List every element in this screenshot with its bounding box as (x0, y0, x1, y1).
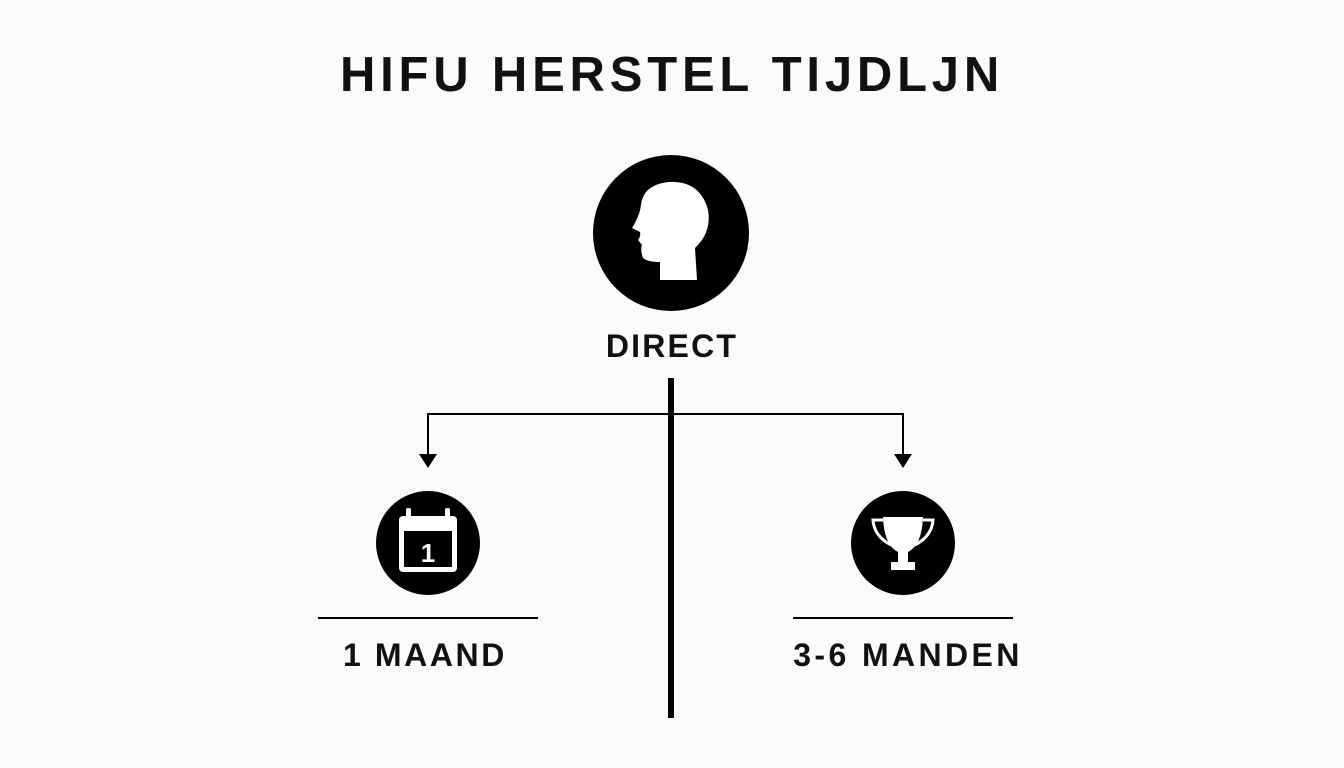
label: direct: DIRECT (606, 328, 738, 364)
branch connector with arrows (419, 414, 912, 468)
vertical timeline (668, 378, 674, 718)
icon: calendar (376, 491, 480, 595)
label: 3-6 manden: 3-6 MANDEN (793, 637, 1023, 673)
underlines (318, 617, 538, 619)
icon: calendar: 1 (421, 538, 435, 568)
icon: head in circle (593, 155, 749, 311)
title: HIFU HERSTEL TIJDLJN (340, 48, 1004, 102)
label: 1 maand: 1 MAAND (343, 637, 507, 673)
icon: trophy (851, 491, 955, 595)
